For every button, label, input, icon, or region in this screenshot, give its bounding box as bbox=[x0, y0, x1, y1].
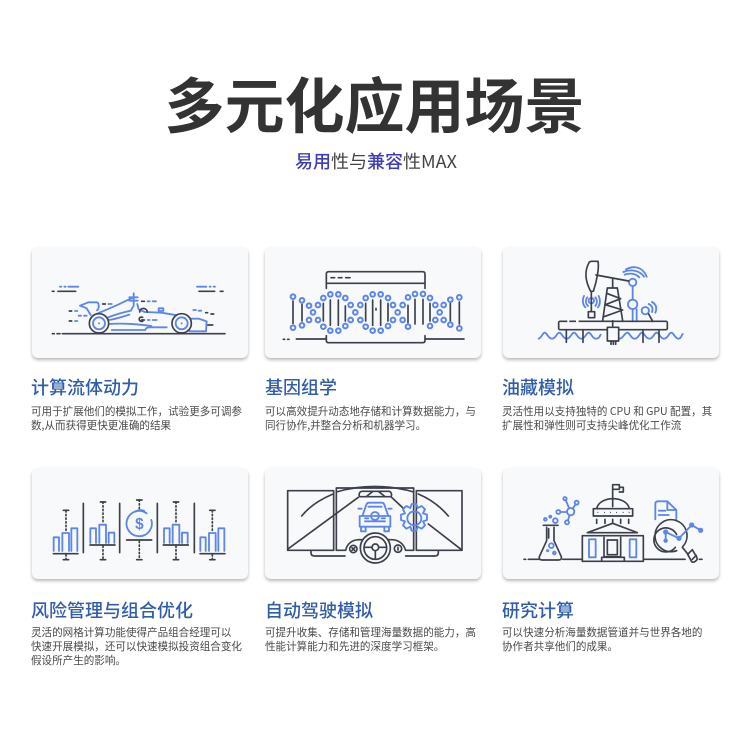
icon: research institute bbox=[524, 485, 702, 562]
heading: card 4: 风险管理与组合优化 bbox=[31, 597, 193, 623]
panel: card 3 background bbox=[503, 247, 719, 358]
panel: card 1 background bbox=[32, 247, 248, 358]
text: card 2 bbox=[265, 404, 476, 433]
heading: card 3: 油藏模拟 bbox=[502, 374, 574, 400]
text: card 6: 协作者共享他们的成果。 bbox=[502, 639, 618, 654]
panel: card 2 background bbox=[265, 247, 481, 358]
text: card 1 bbox=[31, 404, 242, 433]
text: card 4 bbox=[31, 625, 242, 668]
heading: card 6: 研究计算 bbox=[502, 597, 574, 623]
text: card 6 bbox=[502, 625, 702, 654]
heading: card 5: 自动驾驶模拟 bbox=[265, 597, 373, 623]
text: card 4: 快速开展模拟，还可以快速模拟投资组合变化 bbox=[31, 639, 242, 654]
icon: oil platform bbox=[539, 261, 683, 344]
icon: autonomous driving dashboard bbox=[288, 486, 462, 563]
heading: card 2: 基因组学 bbox=[265, 374, 337, 400]
panel: card 6 background bbox=[503, 468, 719, 579]
text: card 5 bbox=[265, 625, 476, 654]
panel: card 5 background bbox=[265, 468, 481, 579]
text: card 5: 性能计算能力和先进的深度学习框架。 bbox=[265, 639, 444, 654]
text: card 4: 灵活的网格计算功能使得产品组合经理可以 bbox=[31, 625, 231, 640]
text: card 3 bbox=[502, 404, 712, 433]
text: card 1: 可用于扩展他们的模拟工作，试验更多可调参 bbox=[31, 404, 242, 419]
subtitle: 易用性与兼容性MAX bbox=[295, 148, 457, 174]
text: card 5: 可提升收集、存储和管理海量数据的能力，高 bbox=[265, 625, 476, 640]
text: card 1: 数,从而获得更快更准确的结果 bbox=[31, 418, 171, 433]
text: card 2: 可以高效提升动态地存储和计算数据能力，与 bbox=[265, 404, 476, 419]
heading: card 1: 计算流体动力 bbox=[31, 374, 139, 400]
icon: race car bbox=[52, 287, 225, 334]
title: 多元化应用场景 bbox=[164, 59, 584, 146]
icon: financial bars: $ bbox=[135, 516, 144, 533]
panel: card 4 background bbox=[32, 468, 248, 579]
text: card 6: 可以快速分析海量数据管道并与世界各地的 bbox=[502, 625, 702, 640]
icon: DNA sequence bbox=[283, 272, 464, 343]
text: card 3: 灵活性用以支持独特的 CPU 和 GPU 配置，其 bbox=[502, 404, 712, 419]
text: card 4: 假设所产生的影响。 bbox=[31, 653, 126, 668]
text: card 2: 同行协作,并整合分析和机器学习。 bbox=[265, 418, 426, 433]
icon: financial bars bbox=[53, 500, 225, 560]
text: card 3: 扩展性和弹性则可支持尖峰优化工作流 bbox=[502, 418, 681, 433]
